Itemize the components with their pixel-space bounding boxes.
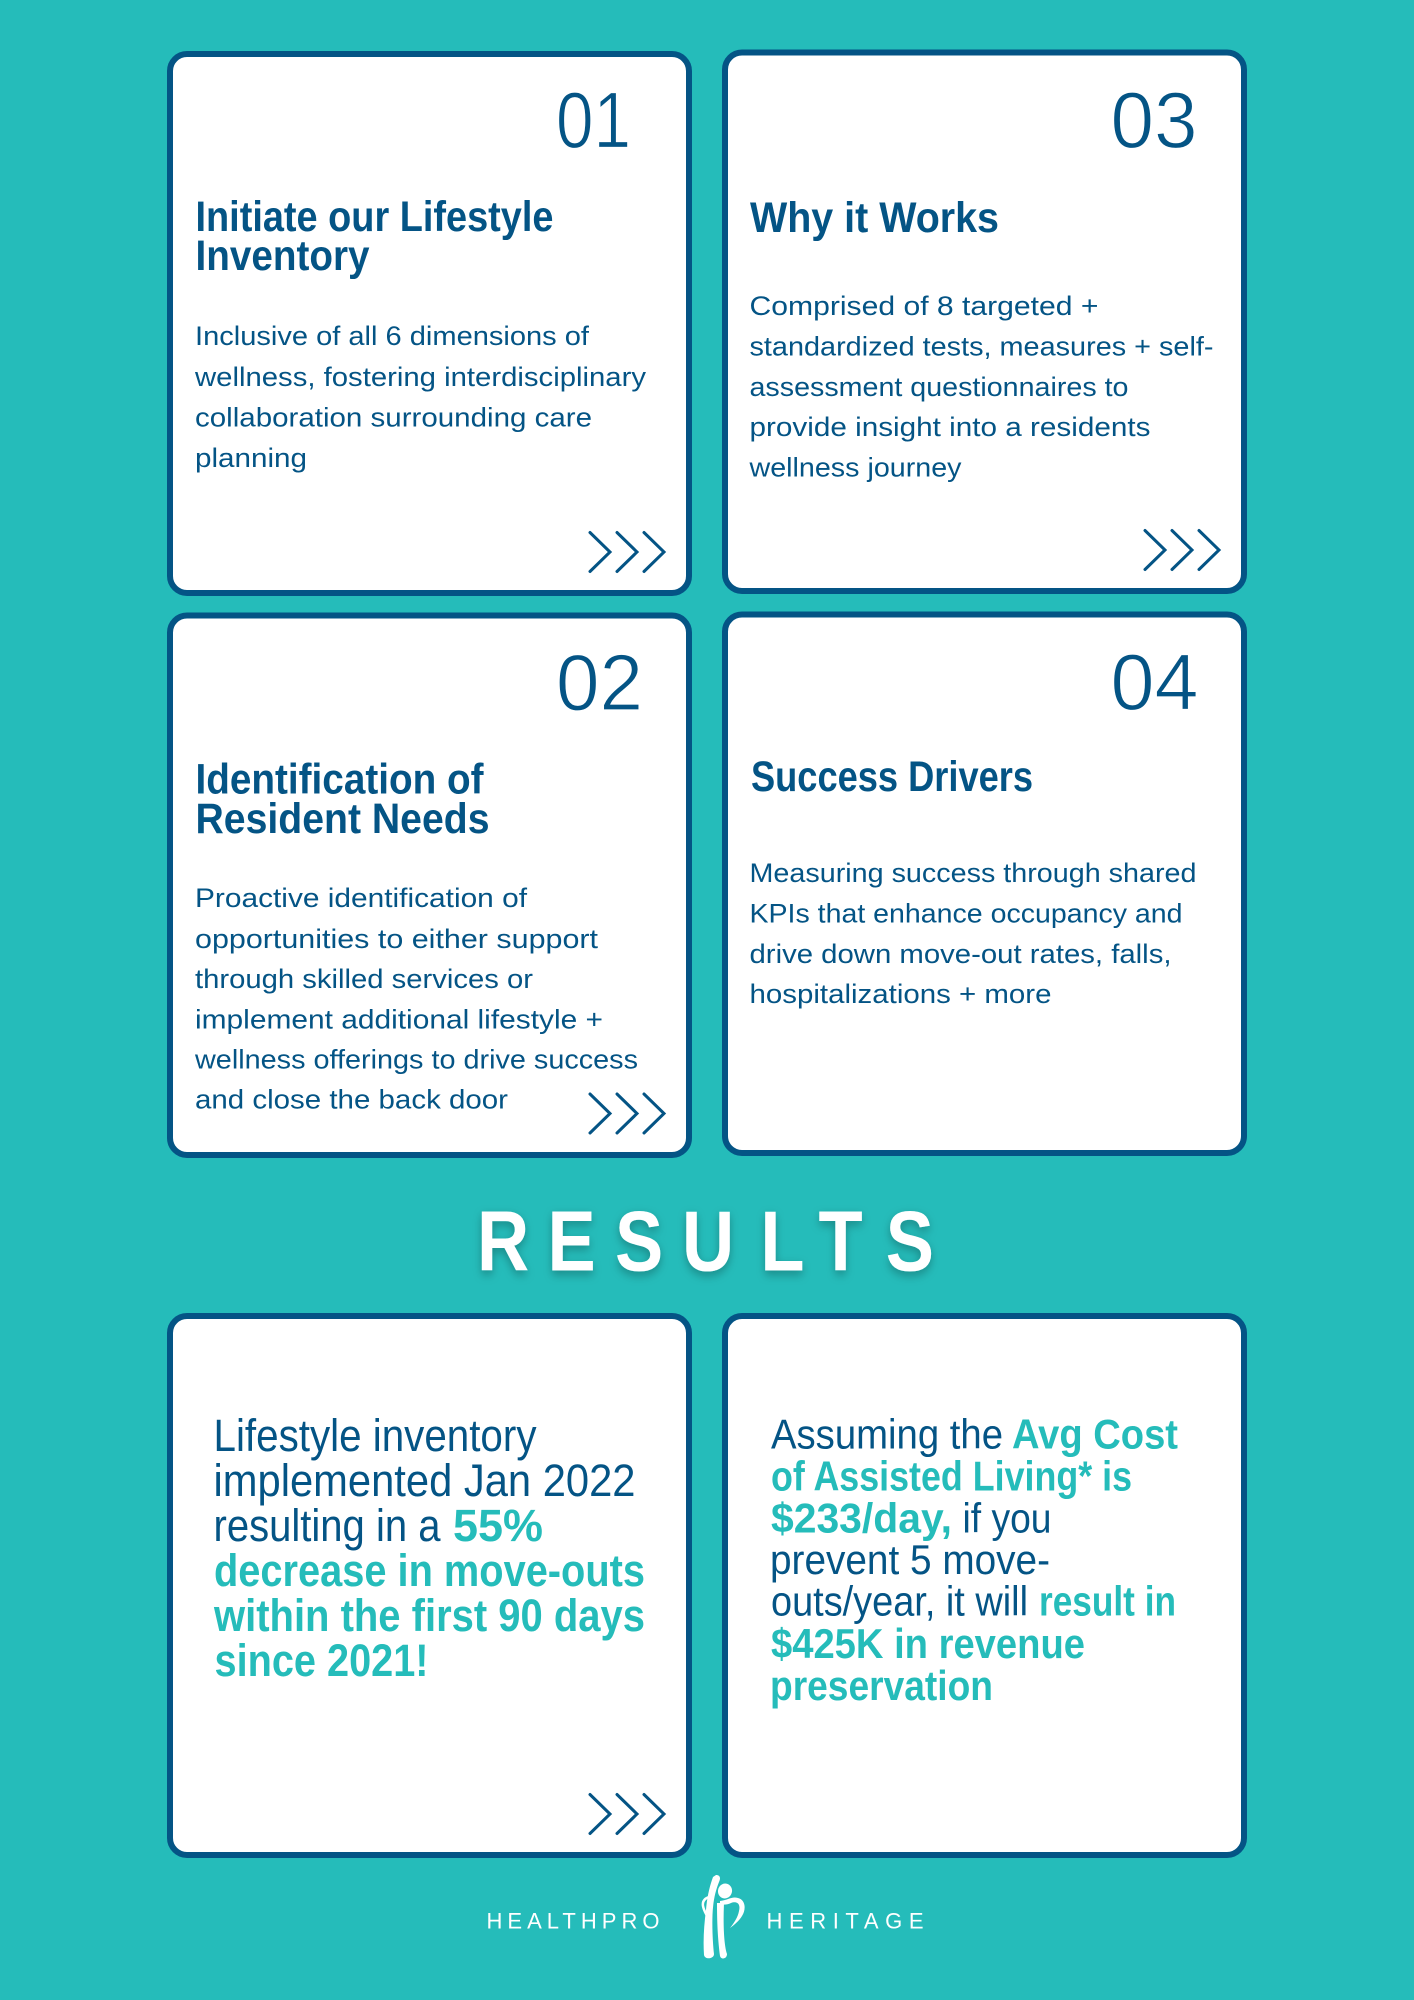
result statement 1: decrease in move-outs — [214, 1545, 645, 1596]
result statement 2 — [770, 1410, 1178, 1709]
body text 02: wellness offerings to drive success — [194, 1044, 638, 1074]
result statement 2: $425K in revenue — [771, 1620, 1085, 1667]
panel: step 04 — [725, 614, 1244, 1153]
body text 04: hospitalizations + more — [750, 979, 1052, 1009]
body text 03 — [748, 291, 1214, 482]
body text 01 — [194, 321, 647, 473]
body text 02: through skilled services or — [195, 964, 533, 994]
result statement 2: Avg Cost — [1012, 1410, 1178, 1458]
heading: Identification of Resident Needs: Identification of — [196, 756, 484, 804]
result statement 1: implemented Jan 2022 — [214, 1455, 636, 1506]
result statement 1: Lifestyle inventory — [214, 1410, 537, 1461]
icon: chevrons 02 — [590, 1094, 664, 1133]
body text 03: provide insight into a residents — [750, 412, 1150, 442]
number 04: 04 — [1110, 638, 1198, 726]
result statement 2: result in — [1039, 1578, 1176, 1624]
body text 03: standardized tests, measures + self- — [750, 332, 1214, 362]
card frame 04 — [725, 614, 1244, 1153]
body text 01: collaboration surrounding care — [195, 402, 592, 432]
panel: result revenue — [725, 1316, 1244, 1855]
body text 04: drive down move-out rates, falls, — [750, 939, 1172, 969]
panel: step 03 — [725, 52, 1244, 591]
body text 04 — [750, 858, 1196, 1009]
card frame 02 — [170, 616, 689, 1155]
result statement 1: resulting in a — [214, 1500, 441, 1551]
result statement 1 — [213, 1410, 645, 1686]
panel: result move-outs — [170, 1316, 689, 1855]
heading: Initiate our Lifestyle Inventory: Initiate our Lifestyle — [196, 193, 554, 241]
card frame 01 — [170, 54, 689, 593]
body text 04: Measuring success through shared — [750, 858, 1196, 888]
body text 02 — [194, 883, 638, 1114]
card frame 03 — [725, 52, 1244, 591]
card frame result 1 — [170, 1316, 689, 1855]
wordmark: HEALTHPRO: HEALTHPRO — [486, 1908, 660, 1934]
result statement 2: Assuming the — [771, 1410, 1003, 1458]
result statement 2: of Assisted Living* is — [771, 1452, 1132, 1500]
result statement 2: $233/day, — [771, 1494, 952, 1542]
number 02: 02 — [556, 638, 643, 727]
heading: Initiate our Lifestyle Inventory — [196, 193, 554, 280]
result statement 1: since 2021! — [214, 1635, 428, 1686]
body text 03: assessment questionnaires to — [750, 372, 1128, 402]
icon: chevrons 03 — [1145, 530, 1219, 570]
body text 04: KPIs that enhance occupancy and — [750, 898, 1182, 928]
body text 02: and close the back door — [195, 1084, 508, 1114]
result statement 2: if you — [962, 1494, 1052, 1542]
logo: HealthPro Heritage — [486, 1875, 924, 1958]
wordmark: HERITAGE: HERITAGE — [766, 1908, 924, 1934]
heading: Identification of Resident Needs — [196, 756, 490, 843]
number 03: 03 — [1110, 76, 1198, 164]
body text 02: implement additional lifestyle + — [195, 1004, 603, 1034]
number 01: 01 — [556, 76, 631, 164]
body text 01: wellness, fostering interdisciplinary — [194, 362, 647, 392]
panel: step 02 — [170, 616, 689, 1155]
icon: chevrons result — [590, 1794, 664, 1834]
heading: Identification of Resident Needs: Resident Needs — [196, 795, 490, 843]
body text 02: Proactive identification of — [195, 883, 528, 913]
card frame result 2 — [725, 1316, 1244, 1855]
body text 01: planning — [195, 443, 307, 473]
body text 03: wellness journey — [748, 452, 962, 482]
result statement 2: preservation — [770, 1662, 993, 1709]
icon: figure mark — [703, 1875, 745, 1958]
panel: step 01 — [170, 54, 689, 593]
heading: Success Drivers: Success Drivers — [751, 753, 1033, 801]
body text 02: opportunities to either support — [195, 924, 599, 954]
result statement 1: within the first 90 days — [213, 1590, 645, 1641]
heading: Why it Works: Why it Works — [750, 194, 999, 242]
heading: RESULTS: RESULTS — [477, 1194, 934, 1289]
result statement 1: 55% — [453, 1500, 543, 1551]
result statement 2: prevent 5 move- — [770, 1536, 1050, 1583]
body text 01: Inclusive of all 6 dimensions of — [195, 321, 590, 351]
heading: Initiate our Lifestyle Inventory: Inventory — [196, 232, 370, 280]
result statement 2: outs/year, it will — [771, 1578, 1028, 1624]
icon: chevrons 01 — [590, 532, 664, 572]
body text 03: Comprised of 8 targeted + — [750, 291, 1098, 321]
